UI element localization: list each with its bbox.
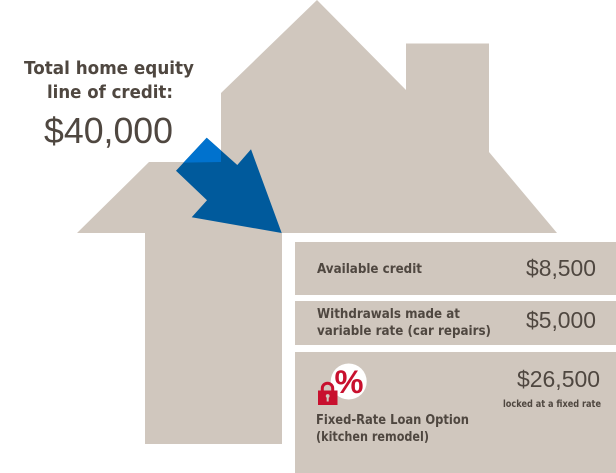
title: total home equity line of credit: line of credit: (47, 82, 173, 103)
panel: withdrawals at variable rate: $5,000 (526, 307, 596, 333)
title: total home equity line of credit: Total home equity (24, 58, 194, 79)
panel: withdrawals at variable rate (295, 301, 616, 345)
house silhouette (77, 0, 557, 444)
total amount: $40,000 (44, 110, 173, 151)
panel: available credit (295, 242, 616, 295)
panel: available credit: Available credit (317, 262, 422, 277)
icon: percent badge with padlock: % (334, 364, 364, 400)
title: total home equity line of credit (24, 58, 194, 103)
panel: fixed-rate loan option: Fixed-Rate Loan Option (316, 413, 469, 428)
panel: fixed-rate loan option: $26,500 (517, 366, 600, 392)
arrow pointing into the house (176, 138, 282, 233)
panel: fixed-rate loan option: (kitchen remodel) (316, 430, 429, 445)
panel: withdrawals at variable rate: Withdrawals made at (317, 307, 460, 322)
panel: withdrawals at variable rate: variable rate (car repairs) (317, 324, 491, 339)
panel: available credit: $8,500 (526, 255, 596, 281)
icon: percent badge with padlock (318, 364, 367, 405)
panel: fixed-rate loan option (295, 352, 616, 473)
